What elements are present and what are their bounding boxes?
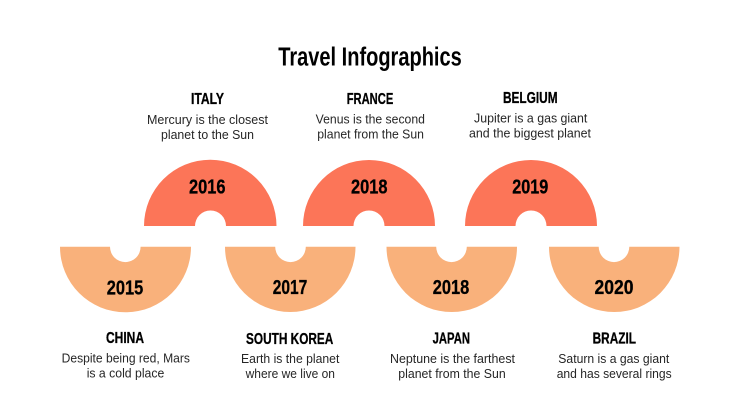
panel: 2018 France: [303, 91, 435, 226]
arc: 2016: [144, 160, 276, 226]
year: 2020: 2020: [594, 276, 634, 299]
text: Brazil description: Saturn is a gas giant: [558, 352, 670, 366]
arc: 2015: [60, 247, 191, 312]
arc: 2018 bottom: [386, 247, 517, 312]
text: Japan description: planet from the Sun: [398, 367, 506, 381]
year: 2018 bottom: 2018: [433, 276, 469, 299]
heading: Italy: ITALY: [191, 91, 224, 108]
text: Italy description: planet to the Sun: [161, 128, 254, 142]
panel: 2017 South Korea: [225, 247, 356, 381]
panel: 2015 China: [60, 247, 191, 380]
year: 2015: 2015: [107, 276, 143, 299]
year: 2018 top: 2018: [351, 175, 388, 198]
arc: 2020: [549, 247, 680, 312]
arc: 2017: [225, 247, 356, 312]
text: Belgium description: and the biggest planet: [469, 126, 592, 140]
heading: China: CHINA: [106, 330, 144, 347]
text: South Korea description: where we live on: [245, 367, 335, 381]
panel: 2020 Brazil: [549, 247, 680, 381]
panel: 2019 Belgium: [465, 90, 597, 226]
text: China description: Despite being red, Mars: [62, 351, 190, 365]
heading: Belgium: BELGIUM: [503, 90, 558, 107]
year: 2017: 2017: [273, 276, 307, 299]
heading: South Korea: SOUTH KOREA: [246, 331, 334, 348]
arc: 2018 top: [303, 160, 435, 226]
heading: France: FRANCE: [347, 91, 394, 108]
year: 2019: 2019: [512, 175, 548, 198]
text: France description: Venus is the second: [316, 112, 425, 126]
heading: Japan: JAPAN: [433, 330, 470, 348]
arc: 2019: [465, 160, 597, 226]
panel: 2018 Japan: [386, 247, 517, 381]
text: China description: is a cold place: [87, 366, 164, 380]
text: France description: planet from the Sun: [317, 128, 424, 142]
text: Brazil description: and has several rings: [557, 367, 672, 381]
title: Travel Infographics: [278, 44, 462, 72]
text: Japan description: Neptune is the farthest: [390, 352, 516, 366]
text: Belgium description: Jupiter is a gas giant: [474, 112, 588, 126]
panel: 2016 Italy: [144, 91, 276, 226]
year: 2016: 2016: [189, 175, 226, 198]
heading: Brazil: BRAZIL: [593, 330, 636, 348]
text: Italy description: Mercury is the closest: [147, 113, 269, 127]
text: South Korea description: Earth is the planet: [241, 352, 340, 366]
